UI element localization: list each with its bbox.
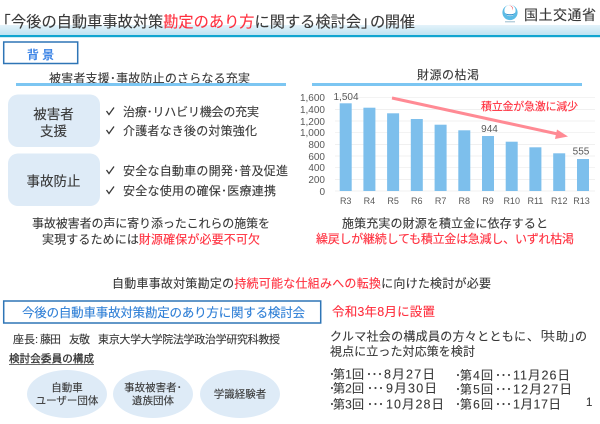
- meeting schedule: ･: [455, 368, 461, 382]
- bar chart: reserve fund R3 to R13: 555: [573, 146, 590, 158]
- logo: ministry mark and name: 国土交通省: [524, 7, 596, 23]
- committee purpose text: 共助: [543, 330, 568, 344]
- committee heading box: 今後の自動車事故対策勘定のあり方に関する検討会: [22, 305, 305, 320]
- right conclusion text: 繰戻しが継続しても積立金は急減し、いずれ枯渇: [316, 231, 574, 246]
- left heading: 被害者支援･事故防止のさらなる充実: [49, 70, 250, 86]
- committee purpose text: 「: [534, 330, 546, 344]
- bar chart: reserve fund R3 to R13: 400: [308, 163, 325, 174]
- meeting schedule: [329, 368, 572, 412]
- committee established date: 令和3年8月に設置: [332, 305, 435, 319]
- meeting schedule: 第3回: [333, 398, 364, 412]
- bar chart: reserve fund R3 to R13: R7: [435, 196, 446, 206]
- panel: victim support: 被害者: [33, 107, 74, 122]
- meeting schedule: ･･･: [367, 398, 384, 412]
- bar chart: reserve fund R3 to R13: R11: [527, 196, 543, 206]
- bar chart: reserve fund R3 to R13: 0: [319, 187, 325, 198]
- committee purpose text: クルマ社会の構成員の方々とともに: [330, 328, 526, 344]
- right conclusion text: [316, 216, 574, 246]
- meeting schedule: ･･･: [495, 398, 512, 412]
- bar chart: reserve fund R3 to R13: R10: [503, 196, 520, 206]
- meeting schedule: 第4回: [460, 368, 493, 382]
- meeting schedule: 1月17日: [513, 398, 561, 412]
- member group: car users: ユーザー団体: [36, 395, 99, 407]
- meeting schedule: 第2回: [333, 382, 364, 396]
- bar chart: reserve fund R3 to R13: 1,200: [300, 117, 325, 128]
- bar chart: reserve fund R3 to R13: R3: [340, 196, 351, 206]
- committee purpose text: 、: [527, 330, 539, 344]
- title: 今後の自動車事故対策勘定のあり方に関する検討会: [11, 14, 361, 31]
- meeting schedule: ･･･: [367, 382, 384, 396]
- bar chart: reserve fund R3 to R13: R8: [459, 196, 470, 206]
- title: 」: [361, 14, 376, 31]
- page number: 1: [586, 397, 592, 409]
- panel: victim support: [8, 94, 100, 147]
- bar chart: reserve fund R3 to R13: R12: [551, 196, 567, 206]
- bar chart: reserve fund R3 to R13: 1,504: [333, 92, 359, 103]
- chairperson: 東京大学大学院法学政治学研究科教授: [98, 332, 280, 346]
- callout: rapid decline: 積立金が急激に減少: [481, 99, 578, 113]
- committee heading box: [4, 301, 321, 323]
- bar chart: reserve fund R3 to R13: [300, 92, 595, 206]
- bar chart: reserve fund R3 to R13: 600: [308, 152, 325, 163]
- member group: car users: [27, 370, 107, 418]
- meeting schedule: ･: [455, 398, 461, 412]
- header band: [0, 25, 600, 37]
- meeting schedule: ･･･: [366, 368, 383, 382]
- chairperson: 友敬: [69, 332, 90, 346]
- panel: victim support items: [106, 105, 259, 138]
- meeting schedule: ･: [329, 382, 335, 396]
- bar chart: reserve fund R3 to R13: 1,600: [300, 93, 325, 104]
- bar chart: reserve fund R3 to R13: R4: [364, 196, 375, 206]
- arrow: declining trend: [392, 98, 568, 139]
- committee purpose text: 」: [569, 330, 581, 344]
- meeting schedule: 9月30日: [386, 382, 437, 396]
- meeting schedule: ･･･: [495, 368, 512, 382]
- panel: accident prevention items: 安全な自動車の開発･普及促進: [123, 164, 288, 178]
- left heading: [16, 70, 286, 86]
- meeting schedule: ･: [329, 398, 335, 412]
- bar chart: reserve fund R3 to R13: 944: [481, 124, 498, 135]
- meeting schedule: ･: [329, 368, 335, 382]
- left conclusion text: 実現するためには財源確保が必要不可欠: [42, 232, 260, 246]
- right conclusion text: 施策充実の財源を積立金に依存すると: [342, 216, 548, 230]
- committee purpose text: 視点に立った対応策を検討: [330, 344, 475, 358]
- meeting schedule: 10月28日: [386, 398, 444, 412]
- meeting schedule: 第5回: [460, 382, 493, 396]
- meeting schedule: ･: [455, 382, 461, 396]
- member group: victims and bereaved families: [113, 370, 193, 418]
- bar chart: reserve fund R3 to R13: 800: [308, 140, 325, 151]
- meeting schedule: 12月27日: [513, 382, 572, 396]
- committee purpose text: [330, 328, 587, 358]
- member group: academic experts: 学識経験者: [214, 388, 266, 400]
- panel: victim support items: 介護者なき後の対策強化: [123, 123, 257, 138]
- right heading: 財源の枯渇: [417, 67, 479, 82]
- panel: accident prevention items: [106, 164, 288, 198]
- panel: victim support: 支援: [40, 124, 67, 139]
- bar chart: reserve fund R3 to R13: R13: [573, 196, 590, 206]
- bar chart: reserve fund R3 to R13: 1,000: [300, 128, 325, 139]
- panel: accident prevention: [8, 154, 100, 206]
- central message: 自動車事故対策勘定の持続可能な仕組みへの転換に向けた検討が必要: [112, 276, 491, 290]
- panel: accident prevention items: 安全な使用の確保･医療連携: [123, 183, 276, 198]
- committee composition heading: 検討会委員の構成: [9, 352, 94, 365]
- meeting schedule: 11月26日: [513, 368, 570, 382]
- member group: car users: 自動車: [51, 381, 83, 394]
- right heading: [312, 67, 582, 86]
- meeting schedule: ･･･: [495, 382, 512, 396]
- member group: victims and bereaved families: 遺族団体: [132, 394, 174, 407]
- logo: ministry mark and name: [502, 5, 596, 23]
- meeting schedule: 8月27日: [384, 368, 435, 382]
- title: の開催: [370, 14, 415, 31]
- member group: victims and bereaved families: 事故被害者･: [124, 381, 182, 394]
- meeting schedule: 第6回: [460, 398, 493, 412]
- left conclusion text: [32, 216, 270, 246]
- section label: background: [4, 42, 78, 64]
- chairperson: [13, 332, 280, 346]
- left conclusion text: 事故被害者の声に寄り添ったこれらの施策を: [32, 216, 270, 230]
- bar chart: reserve fund R3 to R13: 200: [308, 175, 325, 186]
- meeting schedule: 第1回: [333, 368, 364, 382]
- panel: victim support items: 治療･リハビリ機会の充実: [123, 105, 259, 119]
- section label: background: 背 景: [27, 47, 54, 62]
- panel: accident prevention: 事故防止: [26, 174, 80, 189]
- bar chart: reserve fund R3 to R13: R9: [482, 196, 494, 206]
- committee purpose text: の: [575, 330, 587, 344]
- chairperson: 座長:: [13, 333, 38, 346]
- chairperson: 藤田: [40, 333, 61, 346]
- bar chart: reserve fund R3 to R13: 1,400: [300, 105, 325, 116]
- bar chart: reserve fund R3 to R13: R5: [387, 196, 399, 206]
- bar chart: reserve fund R3 to R13: R6: [411, 196, 423, 206]
- member group: academic experts: [200, 370, 280, 418]
